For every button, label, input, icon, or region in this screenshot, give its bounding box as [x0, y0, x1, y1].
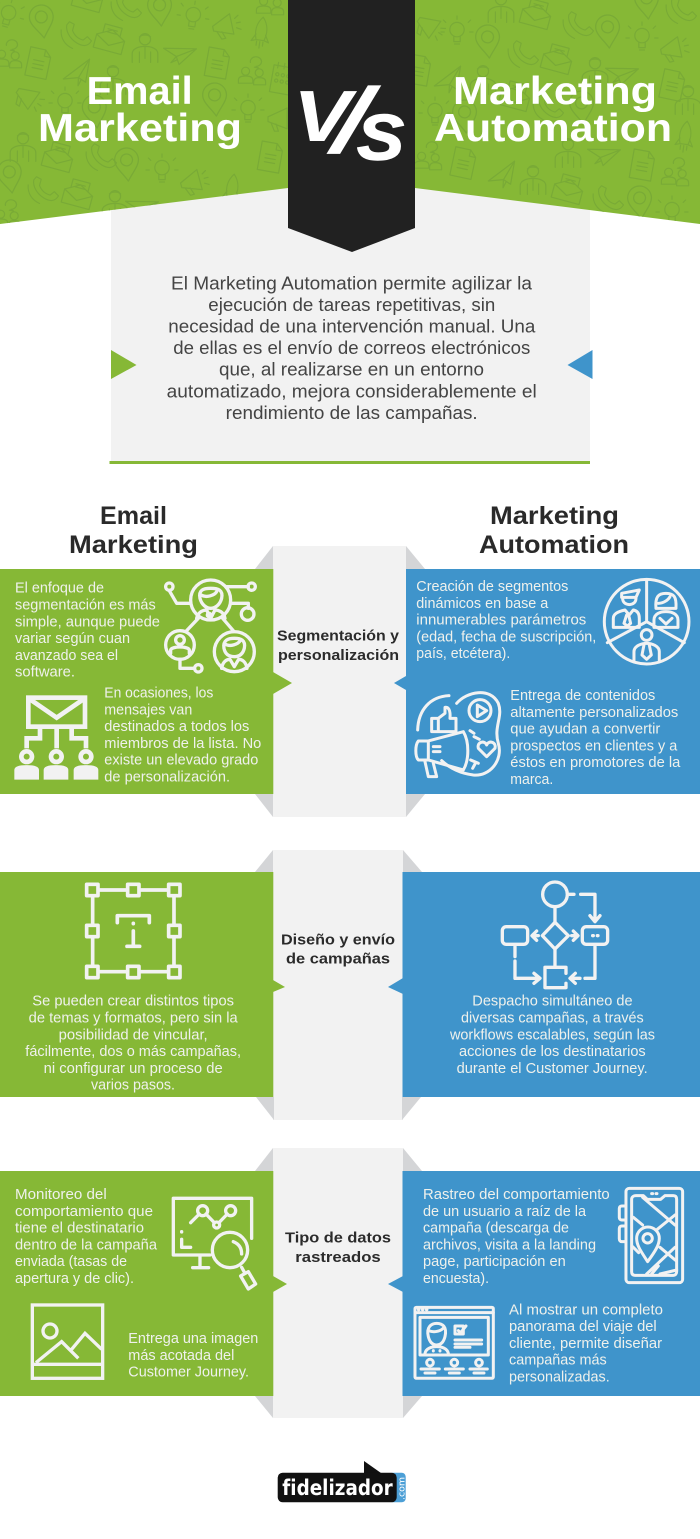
- left column heading: Email: [100, 502, 167, 530]
- header banner: [0, 0, 700, 228]
- icon: workflow: [502, 882, 608, 988]
- text: simple segmentation: segmentación es más: [15, 598, 156, 614]
- center label panel: [255, 546, 425, 817]
- text: campaign design: de temas y formatos, pero sin la: [29, 1010, 238, 1026]
- text: messages to all: [104, 686, 261, 786]
- text: workflows: workflows escalables, según las: [449, 1027, 655, 1043]
- text: campaign design: fácilmente, dos o más campañas,: [25, 1044, 241, 1060]
- text: personalized content: Entrega de contenidos: [510, 688, 655, 704]
- center label panel: Tipo de datos: [285, 1231, 391, 1247]
- icon: megaphone with like: [416, 693, 500, 777]
- left header title: Marketing: [38, 107, 242, 150]
- text: full picture: campañas más: [509, 1353, 607, 1369]
- VS mark: S: [357, 102, 404, 174]
- text: behaviour monitoring: Monitoreo del: [15, 1187, 107, 1203]
- blue panel: [394, 569, 700, 794]
- text: personalized content: altamente personalizados: [510, 705, 678, 721]
- center label panel: rastreados: [295, 1250, 381, 1266]
- text: personalized content: marca.: [510, 772, 553, 788]
- text: full picture: cliente, permite diseñar: [509, 1336, 662, 1352]
- text: campaign design: ni configurar un proceso de: [44, 1061, 223, 1077]
- blue panel: [388, 1171, 700, 1396]
- intro text: El Marketing Automation permite agilizar la: [171, 272, 533, 293]
- intro right arrow: [568, 350, 592, 379]
- blue panel: [388, 872, 700, 1097]
- intro text: rendimiento de las campañas.: [226, 402, 478, 423]
- intro text: automatizado, mejora considerablemente el: [167, 380, 537, 401]
- text: workflows: diversas campañas, a través: [461, 1010, 644, 1026]
- intro left arrow: [111, 350, 136, 379]
- text: campaign design: posibilidad de vincular,: [59, 1027, 208, 1043]
- text: campaign design: varios pasos.: [91, 1078, 175, 1094]
- text: dynamic segments: Creación de segmentos: [416, 579, 568, 595]
- text: dynamic segments: [416, 579, 596, 662]
- text: messages to all: En ocasiones, los: [104, 686, 213, 702]
- right header title: Marketing: [453, 70, 657, 113]
- right header title: Automation: [434, 107, 672, 150]
- text: narrower picture: Customer Journey.: [128, 1365, 249, 1381]
- icon: segmented people wheel: [604, 579, 689, 664]
- text: user tracking: page, participación en: [423, 1254, 566, 1270]
- left column heading: [69, 502, 198, 559]
- panel: intro: [110, 180, 592, 464]
- text: full picture: personalizadas.: [509, 1370, 610, 1386]
- icon: customer profile window: [415, 1307, 493, 1378]
- center label panel: Segmentación y: [277, 629, 400, 645]
- green panel: [0, 569, 292, 794]
- right column heading: [479, 502, 629, 559]
- intro text: de ellas es el envío de correos electrónicos: [173, 337, 530, 358]
- text: behaviour monitoring: tiene el destinatario: [15, 1221, 144, 1237]
- icon: envelope to list: [17, 698, 96, 777]
- text: personalized content: prospectos en clientes y a: [510, 738, 677, 754]
- intro text: que, al realizarse en un entorno: [219, 359, 484, 380]
- text: workflows: Despacho simultáneo de: [472, 994, 633, 1010]
- left header title: Email: [87, 70, 193, 113]
- text: narrower picture: Entrega una imagen: [128, 1331, 258, 1347]
- text: workflows: acciones de los destinatarios: [459, 1044, 646, 1060]
- green panel: [0, 872, 285, 1097]
- text: user tracking: Rastreo del comportamiento: [423, 1187, 610, 1203]
- text: campaign design: Se pueden crear distintos tipos: [32, 994, 234, 1010]
- text: messages to all: miembros de la lista. No: [104, 736, 261, 752]
- text: workflows: durante el Customer Journey.: [457, 1061, 648, 1077]
- text: dynamic segments: país, etcétera).: [416, 646, 510, 662]
- row: tracked data: [0, 1148, 700, 1418]
- text: dynamic segments: innumerables parámetros: [416, 613, 586, 629]
- VS mark: [293, 69, 404, 174]
- left column heading: Marketing: [69, 531, 198, 559]
- text: simple segmentation: avanzado sea el: [15, 648, 118, 664]
- text: messages to all: destinados a todos los: [104, 719, 249, 735]
- text: behaviour monitoring: apertura y de clic).: [15, 1271, 134, 1287]
- text: personalized content: éstos en promotores de la: [510, 755, 680, 771]
- VS mark: /: [324, 69, 384, 172]
- text: dynamic segments: (edad, fecha de suscripción,: [416, 629, 596, 645]
- text: user tracking: campaña (descarga de: [423, 1221, 569, 1237]
- text: narrower picture: más acotada del: [128, 1348, 234, 1364]
- intro text: [167, 272, 537, 423]
- text: user tracking: encuesta).: [423, 1271, 489, 1287]
- text: simple segmentation: [15, 581, 160, 681]
- text: simple segmentation: simple, aunque puede: [15, 614, 160, 630]
- center label panel: personalización: [278, 648, 399, 664]
- text: full picture: [509, 1302, 663, 1386]
- intro text: necesidad de una intervención manual. Una: [168, 315, 536, 336]
- text: simple segmentation: software.: [15, 665, 75, 681]
- text: user tracking: archivos, visita a la landing: [423, 1237, 596, 1253]
- icon: monitor and magnifier: [173, 1198, 256, 1289]
- text: workflows: [449, 994, 655, 1077]
- text: behaviour monitoring: dentro de la campaña: [15, 1237, 157, 1253]
- text: user tracking: de un usuario a raíz de la: [423, 1204, 586, 1220]
- black ribbon: [288, 0, 415, 252]
- center label panel: de campañas: [286, 952, 390, 968]
- text: narrower picture: [128, 1331, 258, 1381]
- logo: fidelizador.com: [278, 1461, 407, 1502]
- text: full picture: Al mostrar un completo: [509, 1302, 663, 1318]
- text: behaviour monitoring: [15, 1187, 157, 1287]
- text: campaign design: [25, 994, 241, 1094]
- text: personalized content: [510, 688, 680, 788]
- row: segmentation: [0, 546, 700, 817]
- right header title: [434, 70, 672, 150]
- row: design and send: [0, 850, 700, 1120]
- green panel: [0, 1171, 287, 1396]
- text: messages to all: mensajes van: [104, 702, 192, 718]
- text: behaviour monitoring: enviada (tasas de: [15, 1254, 127, 1270]
- logo: fidelizador.com: .com: [397, 1477, 407, 1500]
- text: user tracking: [423, 1187, 610, 1287]
- icon: phone with map: [619, 1188, 683, 1283]
- text: messages to all: de personalización.: [104, 770, 230, 786]
- intro text: ejecución de tareas repetitivas, sin: [208, 294, 495, 315]
- left header title: [38, 70, 242, 150]
- text: simple segmentation: El enfoque de: [15, 581, 104, 597]
- icon: text frame: [87, 884, 180, 978]
- center label panel: Diseño y envío: [281, 932, 395, 948]
- text: dynamic segments: dinámicos en base a: [416, 596, 548, 612]
- text: behaviour monitoring: comportamiento que: [15, 1204, 153, 1220]
- VS mark: V: [293, 77, 358, 157]
- icon: user network: [166, 580, 255, 672]
- center label panel: [255, 1148, 422, 1418]
- center label panel: [255, 850, 422, 1120]
- logo: fidelizador.com: fidelizador: [282, 1476, 393, 1501]
- icon: image frame: [32, 1305, 103, 1378]
- header doodle pattern: [0, 0, 700, 228]
- text: messages to all: existe un elevado grado: [104, 753, 258, 769]
- text: full picture: panorama del viaje del: [509, 1319, 657, 1335]
- right column heading: Marketing: [490, 502, 619, 530]
- right column heading: Automation: [479, 531, 629, 559]
- text: personalized content: que ayudan a convertir: [510, 722, 661, 738]
- text: simple segmentation: variar según cuan: [15, 631, 130, 647]
